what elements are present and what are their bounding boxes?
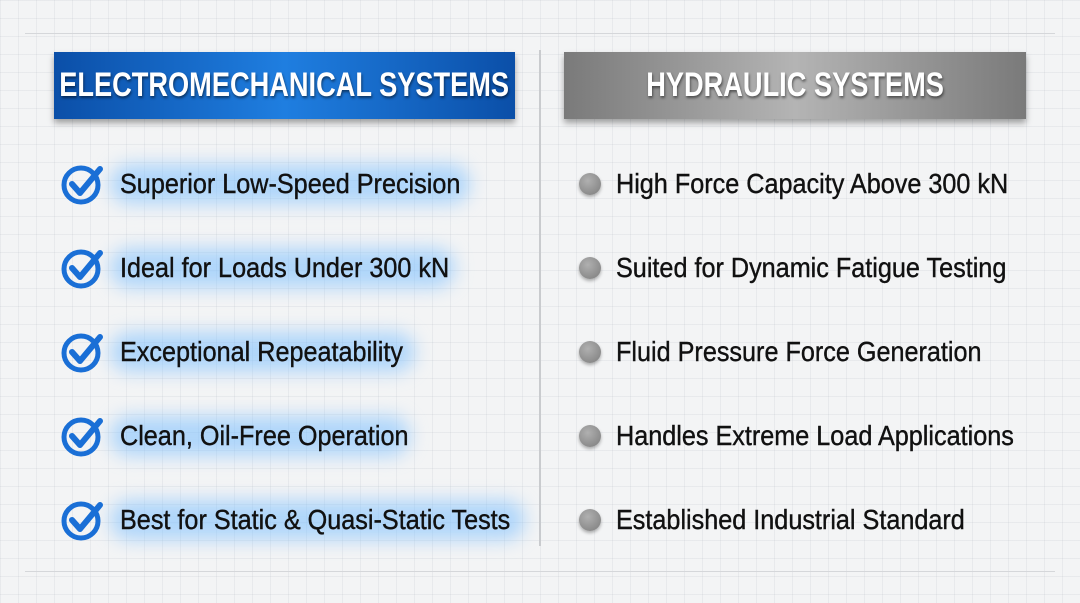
divider (539, 50, 541, 546)
panel: electromechanical list (62, 153, 534, 551)
item 5 (62, 489, 534, 551)
item 4 (62, 405, 419, 467)
item 4: Handles Extreme Load Applications (616, 420, 1014, 451)
item 3 (62, 321, 424, 383)
item 2 (62, 237, 464, 299)
header: electromechanical: ELECTROMECHANICAL SYSTEMS (60, 66, 509, 104)
item 5: Best for Static & Quasi-Static Tests (120, 504, 510, 535)
item 2: Ideal for Loads Under 300 kN (120, 252, 449, 283)
header: hydraulic (564, 52, 1026, 119)
panel: hydraulic list (577, 168, 1014, 535)
item 1 (62, 153, 479, 215)
item 5: Established Industrial Standard (616, 504, 965, 535)
item 1: Superior Low-Speed Precision (120, 168, 460, 199)
item 4: Clean, Oil-Free Operation (120, 420, 409, 451)
item 3: Fluid Pressure Force Generation (616, 336, 982, 367)
item 1: High Force Capacity Above 300 kN (616, 168, 1008, 199)
item 3: Exceptional Repeatability (120, 336, 403, 367)
header: electromechanical (54, 52, 515, 119)
header: hydraulic: HYDRAULIC SYSTEMS (646, 66, 944, 104)
item 2: Suited for Dynamic Fatigue Testing (616, 252, 1006, 283)
